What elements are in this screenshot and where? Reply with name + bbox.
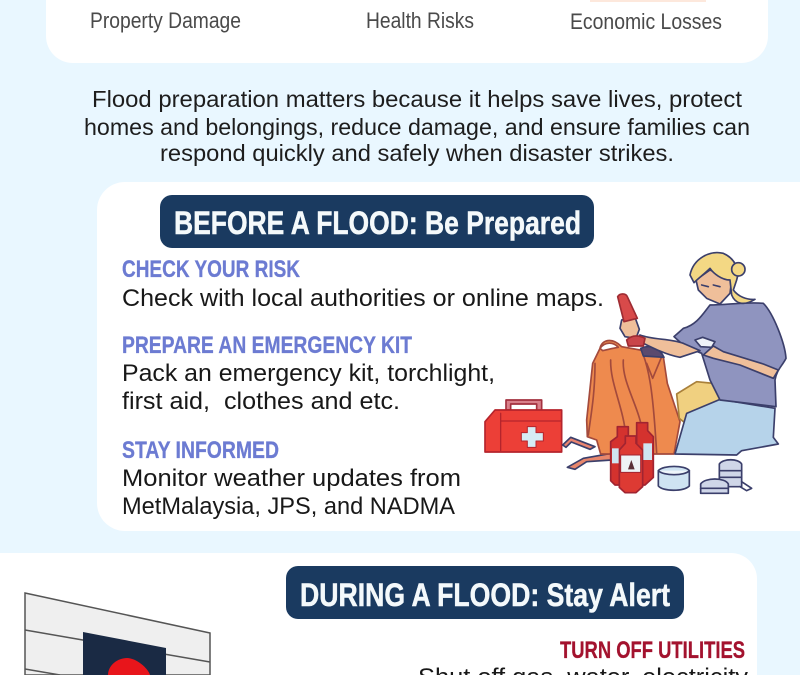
heading: during a flood: DURING A FLOOD: Stay Alert xyxy=(300,577,670,613)
tip: prepare an emergency kit: PREPARE AN EMERGENCY KIT xyxy=(122,332,412,359)
tip: check your risk: Check with local authorities or online maps. xyxy=(122,285,604,312)
panel: during a flood xyxy=(0,553,757,675)
text block: why flood preparation matters: respond quickly and safely when disaster strikes. xyxy=(160,140,674,166)
illustration: building with flood warning xyxy=(25,593,210,675)
label: property damage: Property Damage xyxy=(90,8,241,33)
tip: stay informed: MetMalaysia, JPS, and NADMA xyxy=(122,493,455,520)
text block: why flood preparation matters: homes and belongings, reduce damage, and ensure families can xyxy=(84,114,750,140)
figure: seated woman xyxy=(618,253,786,455)
tip: stay informed: Monitor weather updates from xyxy=(122,465,461,492)
illustration: person packing an emergency kit xyxy=(485,253,786,493)
icon: bandage rolls xyxy=(658,460,752,493)
panel: before a flood xyxy=(97,182,800,531)
panel: impacts of floods xyxy=(46,0,768,63)
tip: check your risk xyxy=(122,256,604,312)
icon: backpack xyxy=(563,340,680,469)
text block: why flood preparation matters: Flood preparation matters because it helps save lives, protect xyxy=(92,86,742,112)
tip: prepare an emergency kit: Pack an emergency kit, torchlight, xyxy=(122,360,495,387)
tip: stay informed: STAY INFORMED xyxy=(122,437,279,464)
icon: red alert xyxy=(108,658,150,675)
tip: turn off utilities xyxy=(420,641,748,675)
tip: stay informed xyxy=(122,437,461,520)
tip: check your risk: CHECK YOUR RISK xyxy=(122,256,301,283)
icon: first aid box xyxy=(485,400,562,452)
label: economic losses: Economic Losses xyxy=(570,9,722,34)
icon: red bottles xyxy=(611,423,653,493)
tip: turn off utilities: TURN OFF UTILITIES xyxy=(560,637,745,664)
icon: folded clothes xyxy=(677,382,721,422)
text block: why flood preparation matters xyxy=(84,86,750,166)
heading: during a flood xyxy=(286,566,684,619)
label: health risks: Health Risks xyxy=(366,8,474,33)
tip: prepare an emergency kit: first aid, clothes and etc. xyxy=(122,388,400,415)
tip: prepare an emergency kit xyxy=(122,332,495,415)
heading: before a flood: BEFORE A FLOOD: Be Prepared xyxy=(174,205,581,241)
heading: before a flood xyxy=(160,195,594,248)
